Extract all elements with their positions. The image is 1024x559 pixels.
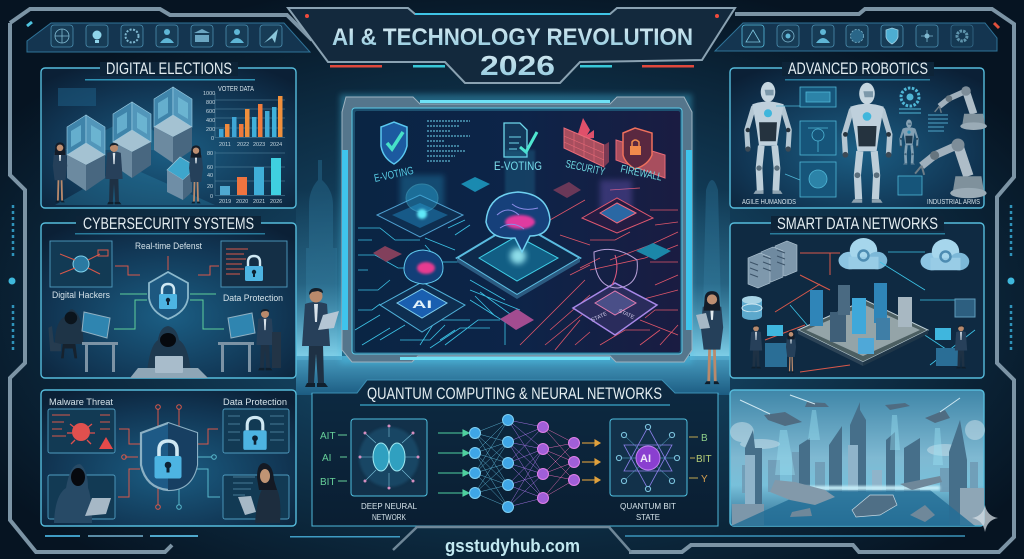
chip: top left with blue brain <box>377 175 463 237</box>
businesswoman with laptop <box>223 463 289 523</box>
bar chart: voter data: VOTER DATA <box>218 86 254 93</box>
industrial arm top <box>935 86 987 130</box>
caption: STATE <box>636 512 660 522</box>
bar chart: yearly: 2019 <box>219 199 231 205</box>
shield <box>149 272 188 319</box>
skyline <box>732 402 984 526</box>
bar chart: voter data: 400 <box>206 118 215 124</box>
panel: quantum computing and neural networks <box>312 380 718 526</box>
bar chart: voter data: 2024 <box>270 142 282 148</box>
central shield <box>141 423 197 490</box>
output labels: BIT <box>696 454 712 465</box>
heading: QUANTUM COMPUTING & NEURAL NETWORKS <box>367 385 662 403</box>
lock box <box>223 409 289 453</box>
bar chart: yearly: 40 <box>207 173 213 179</box>
flying vehicles <box>740 395 960 475</box>
database <box>742 296 762 320</box>
chip: AI <box>380 250 465 332</box>
security label: SECURITY <box>564 158 606 178</box>
bottom center frame <box>393 527 631 552</box>
chip: AI: AI <box>412 299 432 311</box>
server racks <box>748 241 797 288</box>
right outer frame <box>625 9 1014 552</box>
caption: DEEP NEURAL <box>361 501 417 511</box>
panel: smart data networks <box>730 215 984 378</box>
malware box <box>48 409 115 453</box>
bar chart: voter data: 2023 <box>253 142 265 148</box>
panel: cybersecurity systems <box>41 215 296 378</box>
bar chart: voter data: 800 <box>206 100 215 106</box>
bar chart: yearly: 2026 <box>270 199 282 205</box>
panel: malware and data protection <box>41 390 296 526</box>
output labels: Y <box>701 474 708 485</box>
label: Data Protection <box>223 397 287 408</box>
text: real-time defense: Real-time Defenst <box>135 241 202 252</box>
heading: ADVANCED ROBOTICS <box>788 60 928 78</box>
circuit traces: red <box>520 188 678 350</box>
heading: CYBERSECURITY SYSTEMS <box>83 215 254 233</box>
top-right icon row <box>742 25 973 47</box>
bar chart: yearly: 2021 <box>253 199 265 205</box>
network diagram box <box>50 241 112 287</box>
cloud <box>838 238 887 269</box>
input labels: BIT <box>320 477 336 488</box>
label: Data Protection <box>223 293 283 304</box>
industrial arm bottom <box>915 138 987 198</box>
chip: central with brain <box>457 150 580 299</box>
smart city platform <box>798 283 928 366</box>
presenter: man <box>302 288 339 387</box>
bar chart: voter data: 0 <box>211 136 214 142</box>
small decorative chips <box>373 177 671 330</box>
alert lock box <box>221 241 287 287</box>
website url: gsstudyhub.com <box>445 536 580 556</box>
voters <box>53 142 203 204</box>
voting booths <box>67 87 192 191</box>
caption: NETWORK <box>372 512 406 522</box>
hacker with laptop <box>48 464 115 523</box>
circuit traces: cyan <box>355 220 520 348</box>
title text: AI & TECHNOLOGY REVOLUTION <box>332 24 693 51</box>
data lines <box>928 115 948 131</box>
e-voting label: E-VOTING <box>373 165 415 185</box>
hacker at desk <box>48 309 118 372</box>
clouds <box>730 420 985 456</box>
heading: DIGITAL ELECTIONS <box>106 60 232 78</box>
central screen <box>340 94 692 364</box>
icon: check shield <box>381 122 407 164</box>
hooded hacker at laptop <box>130 326 208 378</box>
input labels: AI <box>322 453 331 464</box>
bar chart: yearly: 0 <box>210 194 213 200</box>
small robot schematic <box>900 120 918 165</box>
foreground vehicles <box>770 476 942 522</box>
bar chart: yearly: 20 <box>207 184 213 190</box>
chip: state <box>573 249 657 335</box>
heading: SMART DATA NETWORKS <box>777 215 938 233</box>
input arrows <box>438 430 469 496</box>
humanoid right <box>843 83 891 203</box>
title year: 2026 <box>480 50 555 81</box>
schematic boxes <box>776 87 922 197</box>
e-voting label: E-VOTING <box>494 159 542 173</box>
top-left icon row <box>51 25 282 47</box>
bar chart: voter data: 200 <box>206 127 215 133</box>
corner sparkle <box>972 505 998 532</box>
floor <box>296 356 730 395</box>
analyst at desk <box>218 309 281 372</box>
firewall label: FIREWALL <box>619 163 663 184</box>
bar chart: yearly: 2020 <box>236 199 248 205</box>
title plate <box>288 8 735 83</box>
caption: QUANTUM BIT <box>620 501 676 511</box>
bar chart: voter data: 2011 <box>219 142 231 148</box>
panel: digital elections <box>41 60 296 208</box>
operators <box>750 299 975 373</box>
gear <box>899 88 921 113</box>
background decoration: left monument and light column <box>296 160 342 360</box>
output labels: B <box>701 433 708 444</box>
panel: advanced robotics <box>730 60 987 208</box>
connectors <box>765 252 975 372</box>
connectors <box>114 256 224 329</box>
chip: top right red <box>582 180 653 233</box>
connectors <box>118 405 220 509</box>
panel: future city <box>730 390 998 532</box>
text lines beside shield <box>427 121 470 161</box>
bar chart: voter data <box>203 86 285 148</box>
presenter: woman <box>696 291 723 384</box>
input labels <box>320 431 347 488</box>
background decoration: right lighthouse and light column <box>690 180 730 360</box>
input labels: AIT <box>320 431 336 442</box>
bar chart: yearly: 60 <box>207 165 213 171</box>
deep neural network box <box>351 419 427 496</box>
bar chart: voter data: 1000 <box>203 91 215 97</box>
bar chart: voter data: 600 <box>206 109 215 115</box>
bar chart: voter data: 2022 <box>237 142 249 148</box>
cloud <box>920 239 969 270</box>
label: Digital Hackers <box>52 290 110 301</box>
output arrows <box>582 440 600 483</box>
humanoid left <box>745 82 791 194</box>
quantum bit box: AI <box>640 453 651 465</box>
label: Malware Threat <box>49 397 113 408</box>
chip: state: STATE <box>590 311 608 324</box>
bar chart: yearly <box>207 151 285 205</box>
label: INDUSTRIAL ARMS <box>927 199 980 206</box>
label: AGILE HUMANOIDS <box>742 199 796 206</box>
icon: burning firewall <box>564 118 609 167</box>
light road <box>731 490 975 526</box>
output labels <box>689 433 712 485</box>
left outer frame <box>8 9 400 552</box>
bar chart: yearly: 80 <box>207 151 213 157</box>
neural network graph <box>470 414 580 512</box>
quantum bit box <box>610 419 687 496</box>
chip: state: STATE <box>617 308 635 321</box>
kiosk <box>167 157 197 200</box>
icon: firewall shield <box>616 128 665 178</box>
icon: document <box>504 123 537 157</box>
